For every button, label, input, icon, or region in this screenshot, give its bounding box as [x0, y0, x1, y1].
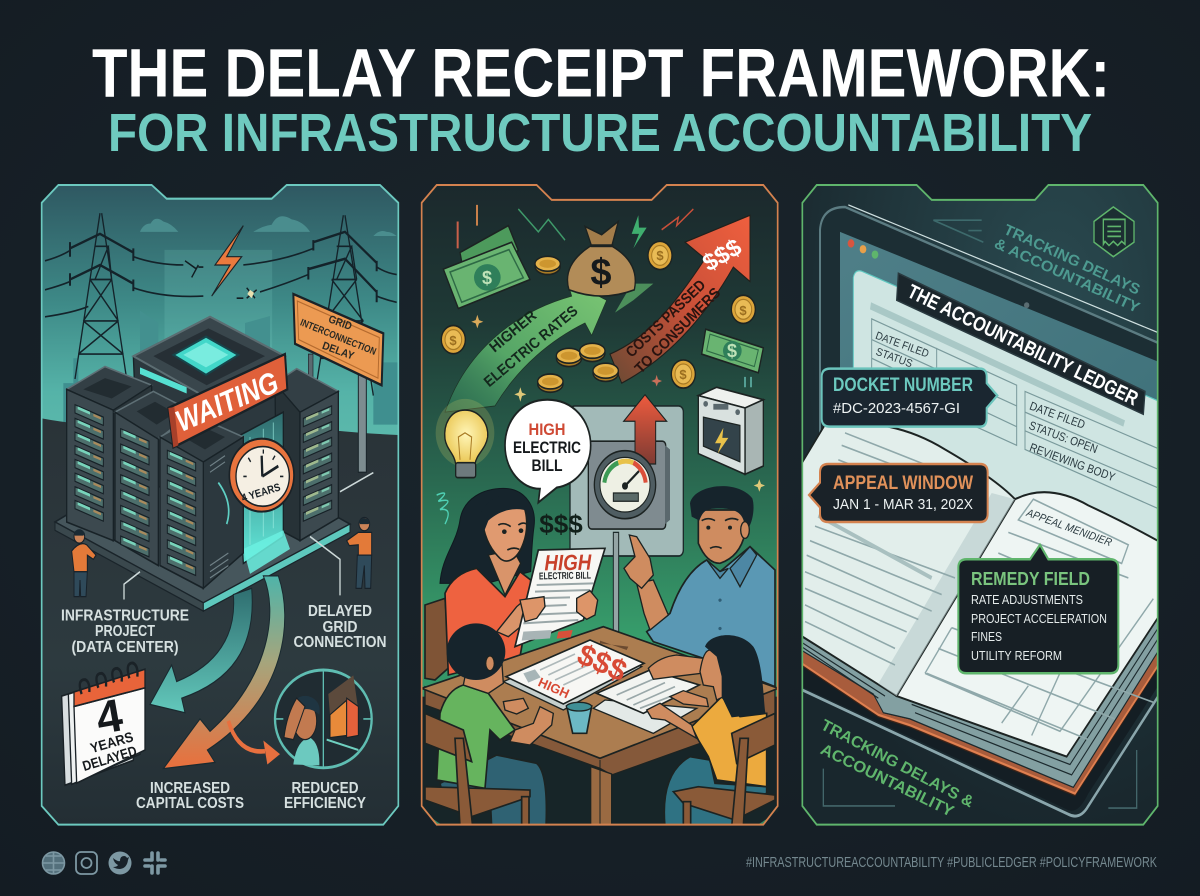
arrow text: higher electric rates: ELECTRIC RATES	[481, 302, 581, 391]
label: increased capital costs: CAPITAL COSTS	[136, 795, 244, 812]
callout: appeal window	[833, 473, 973, 513]
callout box: appeal window	[809, 464, 988, 522]
chair front right	[673, 713, 775, 827]
open book	[795, 423, 1165, 816]
label: delayed grid connection	[294, 603, 386, 651]
label: infrastructure project: (DATA CENTER)	[72, 639, 178, 656]
background gradient	[415, 180, 785, 830]
figure: boy	[437, 623, 553, 827]
banner text: waiting: WAITING	[171, 366, 283, 439]
label: infrastructure project	[61, 608, 189, 656]
calendar text: 4	[92, 688, 127, 744]
icon: reduced efficiency figure	[275, 670, 372, 768]
label: reduced efficiency: EFFICIENCY	[284, 795, 366, 812]
heading: tracking delays top: & ACCOUNTABILITY	[992, 235, 1142, 317]
server rack B	[114, 390, 177, 567]
speech bubble text: HIGH	[528, 420, 566, 439]
figure: man	[624, 486, 775, 687]
table bill text	[536, 638, 632, 701]
worker left	[72, 529, 96, 597]
glowing doorway	[237, 412, 290, 574]
form text right: DATE FILED	[1028, 399, 1087, 432]
sky background	[42, 186, 398, 435]
sign text: DELAY	[320, 340, 356, 363]
speed lines and corner brackets	[823, 220, 1137, 808]
icon: cash stack left	[443, 226, 530, 309]
city skyline and glass building	[63, 250, 400, 425]
icon text: cash dollars	[482, 268, 737, 361]
icon: light bulb	[436, 399, 494, 478]
label: increased capital costs: INCREASED	[150, 780, 230, 797]
icon: twitter	[108, 852, 132, 874]
label: delayed grid connection: CONNECTION	[294, 634, 386, 651]
label: reduced efficiency	[284, 780, 366, 812]
sign text: GRID	[327, 313, 353, 333]
icon text: coin dollars: $	[656, 248, 664, 263]
figure: girl	[647, 635, 767, 827]
label: infrastructure project: PROJECT	[95, 623, 155, 640]
form text right: REVIEWING BODY	[1028, 440, 1117, 484]
callout box: docket number	[822, 369, 997, 427]
held bill text	[539, 550, 593, 582]
icon: receipt hexagon	[1094, 207, 1134, 257]
data center central unit	[133, 317, 285, 437]
worker right	[347, 517, 372, 588]
heading: tracking delays bottom: ACCOUNTABILITY	[818, 741, 957, 821]
speech bubble text	[513, 420, 581, 475]
label: delayed grid connection: DELAYED	[308, 603, 372, 620]
dollar signs: $$$	[539, 509, 583, 539]
footer social icons	[42, 852, 165, 874]
arrow: small orange to efficiency	[228, 721, 280, 765]
server rack D	[275, 369, 338, 541]
form text right: STATUS: OPEN	[1027, 418, 1100, 456]
bills on table	[503, 640, 699, 733]
chair front left	[425, 713, 530, 827]
icon text: coin dollars: $	[679, 367, 687, 382]
decorative zigzags and sparkles	[437, 205, 751, 524]
label: infrastructure project: INFRASTRUCTURE	[61, 608, 189, 624]
calendar text: YEARS	[88, 728, 135, 756]
icon: instagram	[76, 852, 97, 874]
callout: docket number: #DC-2023-4567-GI	[833, 400, 960, 417]
clock text: 4 YEARS	[240, 482, 282, 505]
heading: tracking delays bottom: TRACKING DELAYS &	[818, 717, 977, 811]
label: increased capital costs	[136, 780, 244, 812]
speech bubble text: ELECTRIC	[513, 438, 581, 457]
icon text: cash dollars: $	[482, 268, 492, 288]
icon: broken wire sparks	[185, 261, 257, 298]
panel: infrastructure project delay	[30, 180, 410, 827]
callout: appeal window: APPEAL WINDOW	[833, 473, 973, 494]
chair behind woman	[425, 598, 450, 680]
arrow: teal to calendar	[150, 588, 252, 713]
icon: calendar	[62, 663, 145, 785]
callout box: remedy field	[958, 545, 1118, 673]
cup	[566, 702, 592, 733]
table bill text: HIGH	[536, 674, 572, 701]
panel frame: green	[802, 185, 1158, 825]
arrow text: costs passed to consumers: TO CONSUMERS	[632, 285, 724, 377]
callout: docket number: DOCKET NUMBER	[833, 375, 973, 396]
arrow text: dollar signs: $$$	[698, 233, 747, 277]
icon: money bag	[567, 221, 635, 296]
arrow text: costs passed to consumers: COSTS PASSED	[623, 276, 709, 361]
arrow: teal-orange to capital costs	[163, 576, 285, 769]
icon: lightning bolt	[212, 226, 243, 296]
wall meter panel	[570, 406, 683, 632]
arrow: higher electric rates	[445, 279, 607, 412]
sign: grid interconnection delay	[293, 294, 383, 472]
calendar text	[80, 688, 139, 774]
calendar text: DELAYED	[80, 742, 139, 774]
held bill text: ELECTRIC BILL	[539, 571, 591, 582]
callout leader lines	[124, 473, 373, 600]
title bar	[897, 273, 1145, 414]
tablet device	[820, 205, 1165, 520]
platform	[55, 487, 350, 611]
table	[422, 627, 778, 827]
subtitle: FOR INFRASTRUCTURE ACCOUNTABILITY	[108, 103, 1092, 163]
woman and man hands	[520, 591, 703, 679]
clouds	[140, 216, 397, 236]
held bill paper	[515, 548, 605, 647]
icon text: coin dollars: $	[739, 303, 747, 318]
ledger title: THE ACCOUNTABILITY LEDGER	[904, 281, 1142, 411]
server rack A	[67, 367, 152, 541]
form text left: STATUS	[874, 346, 914, 370]
form text right	[1027, 399, 1117, 484]
coins	[441, 241, 755, 392]
icon text: coin dollars	[449, 248, 747, 382]
callout: remedy field: PROJECT ACCELERATION	[971, 612, 1107, 626]
label: delayed grid connection: GRID	[322, 619, 358, 636]
arrow text: higher electric rates: HIGHER	[486, 307, 540, 356]
panel frame: teal	[42, 185, 398, 825]
floor shadow	[420, 697, 780, 830]
speech bubble text: BILL	[532, 456, 562, 475]
callout: remedy field: RATE ADJUSTMENTS	[971, 593, 1083, 607]
callout: remedy field: UTILITY REFORM	[971, 649, 1062, 663]
figure: woman	[440, 488, 545, 675]
family at the table scene	[422, 486, 777, 824]
background	[795, 180, 1165, 830]
server rack C	[160, 416, 243, 588]
label: reduced efficiency: REDUCED	[292, 780, 358, 797]
icon: left transmission tower	[45, 213, 203, 379]
panel: the accountability ledger	[795, 180, 1165, 830]
icon text: cash dollars: $	[727, 341, 737, 361]
callout: remedy field: REMEDY FIELD	[971, 569, 1090, 589]
icon text: coin dollars: $	[449, 333, 457, 348]
icon: right transmission tower	[243, 215, 397, 396]
ground	[42, 418, 398, 827]
arrow: costs passed to consumers	[610, 215, 750, 383]
table bill text: $$$	[572, 638, 632, 689]
icon text: money bag dollar: $	[590, 252, 612, 294]
icon: globe	[42, 852, 64, 874]
callout: appeal window: JAN 1 - MAR 31, 202X	[833, 496, 973, 513]
callout: remedy field	[971, 569, 1107, 663]
heading: tracking delays top: TRACKING DELAYS	[1001, 221, 1143, 299]
sign text: INTERCONNECTION	[298, 317, 378, 358]
waiting banner	[168, 354, 287, 447]
clock	[229, 439, 294, 512]
speech bubble	[420, 184, 778, 826]
icon: oven	[698, 387, 763, 474]
panel: household electric bill	[415, 180, 785, 830]
form text left: DATE FILED	[874, 330, 930, 360]
held bill text: HIGH	[544, 550, 593, 575]
icon: cash right	[702, 329, 763, 373]
icon: slack	[145, 853, 165, 873]
title block	[92, 34, 1110, 163]
gauge	[594, 451, 656, 519]
callout: remedy field: FINES	[971, 630, 1002, 644]
book page heading: APPEAL MENIDIER	[1024, 507, 1113, 549]
arrow: meter rising	[624, 395, 667, 464]
callout: docket number	[833, 375, 973, 417]
ledger window	[853, 271, 1165, 553]
